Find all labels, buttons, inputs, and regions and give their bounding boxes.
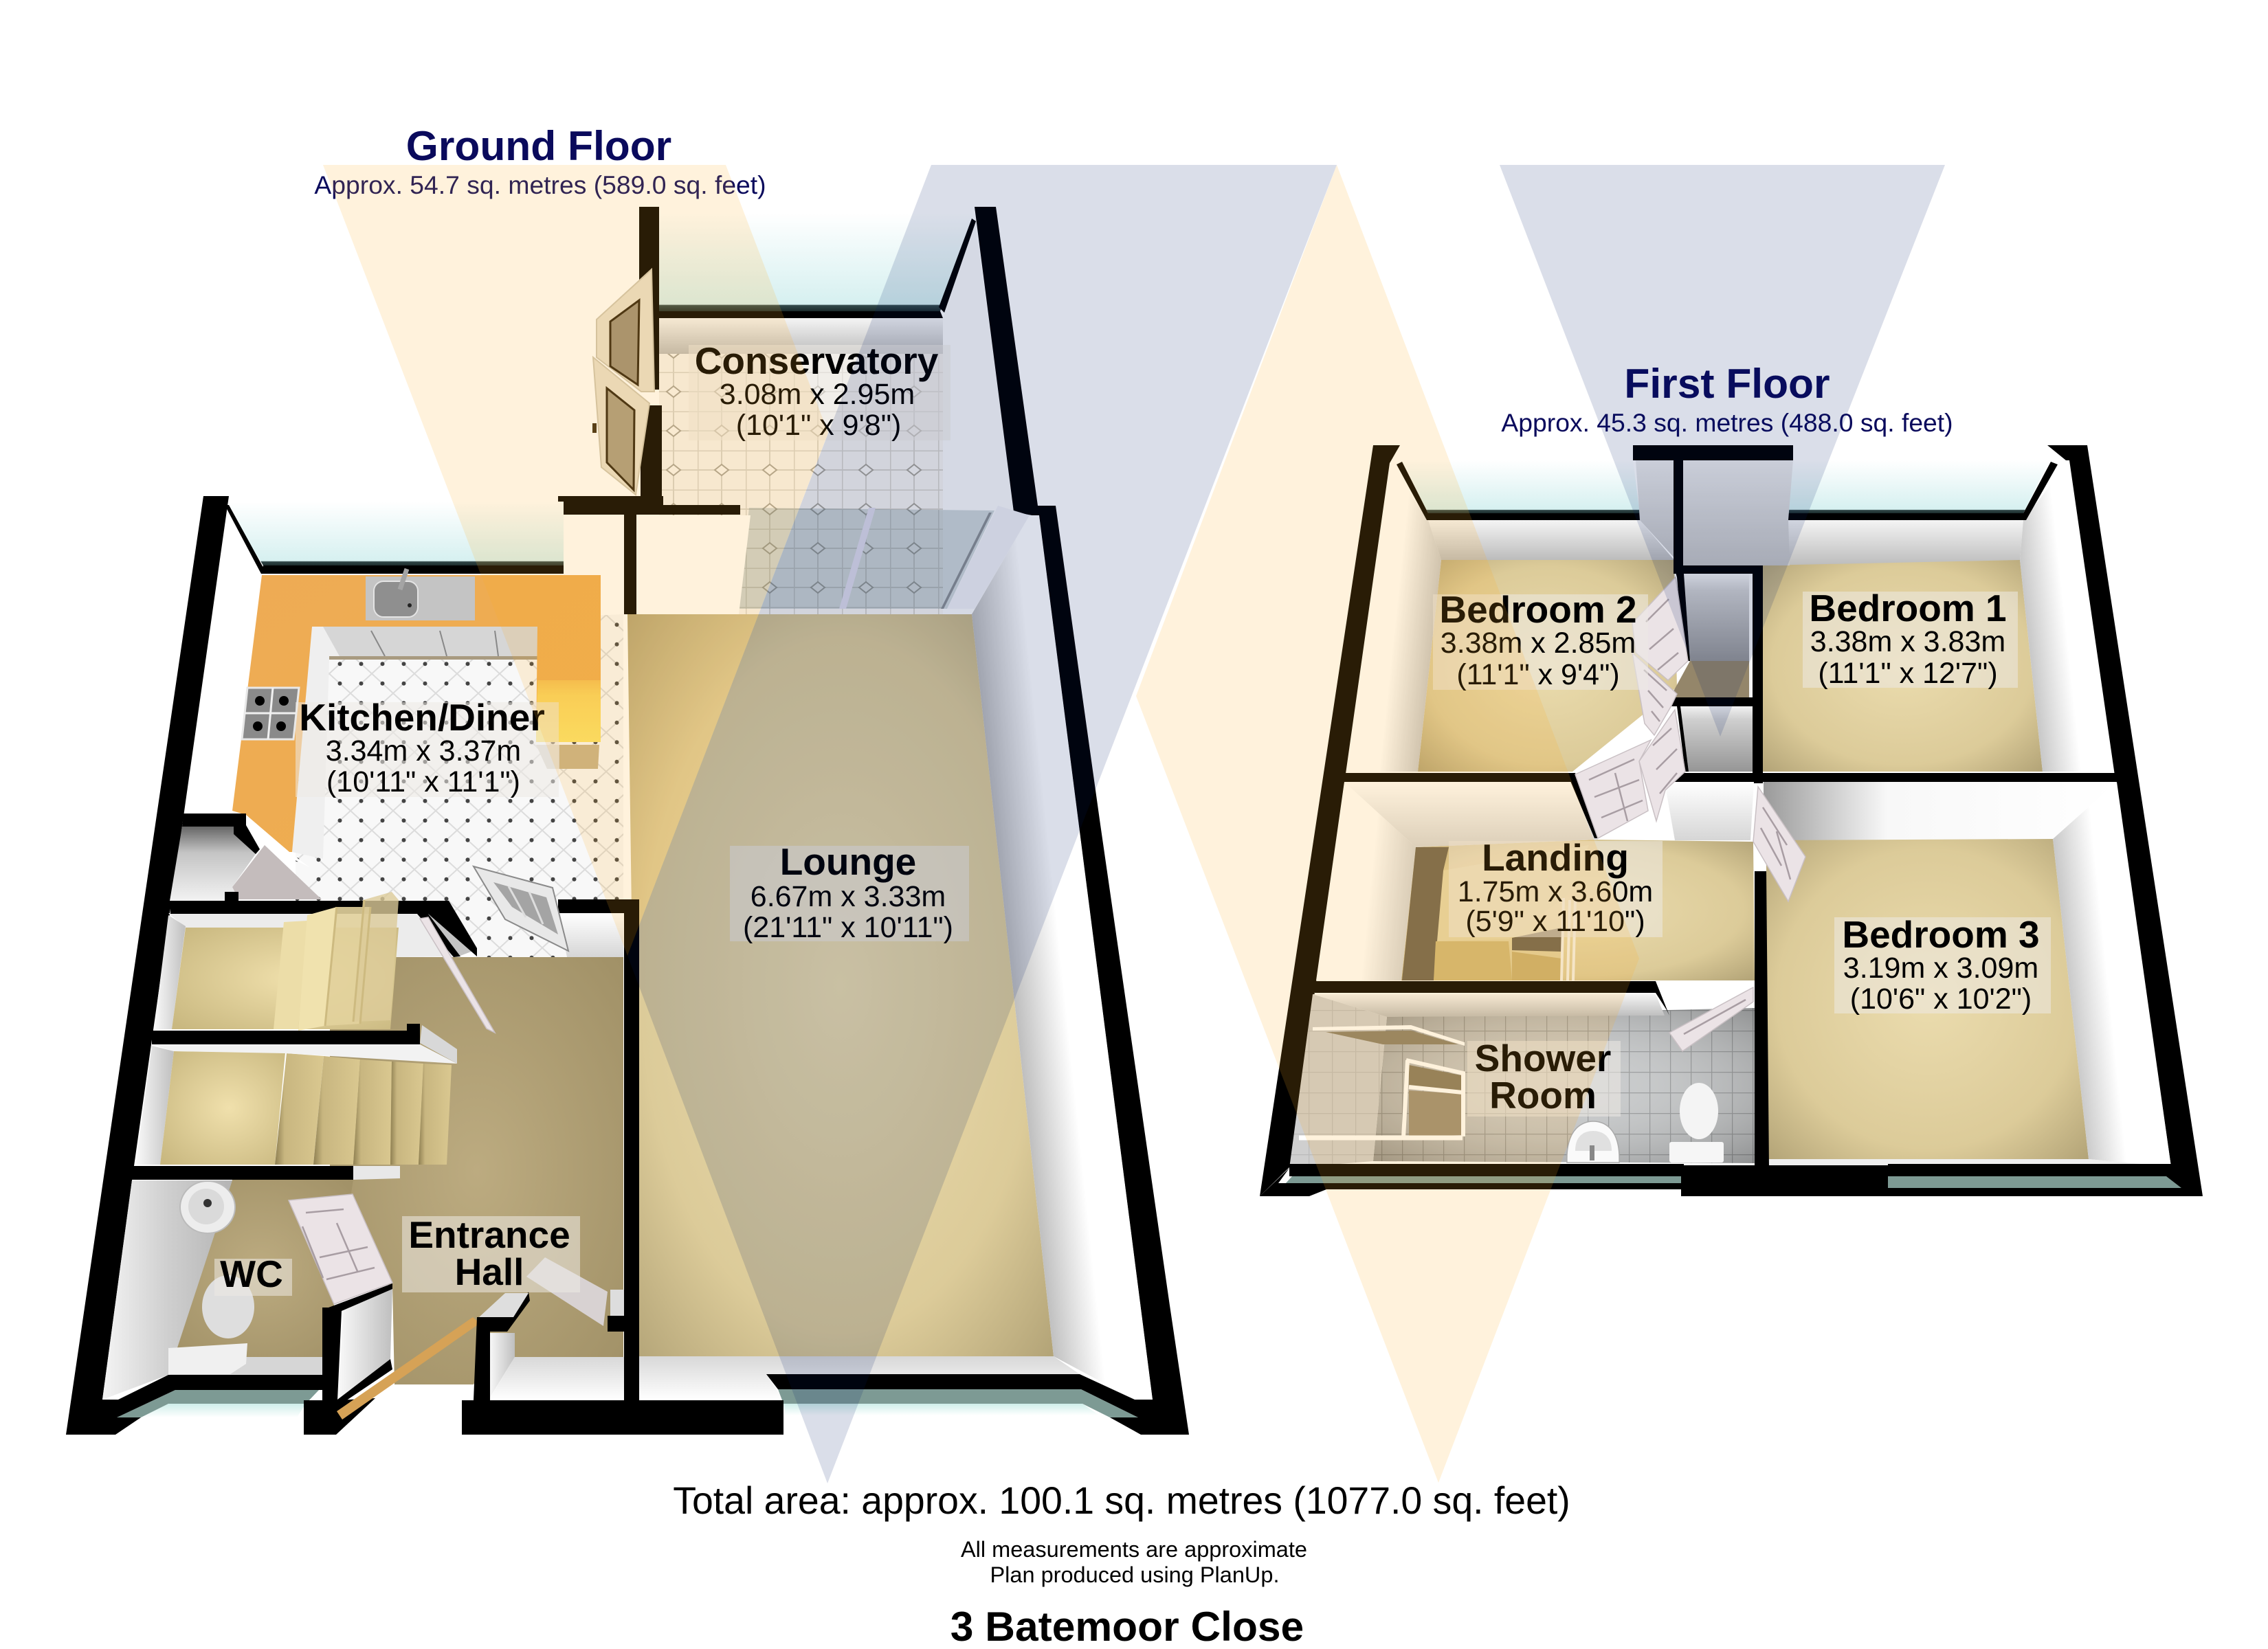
label: Shower Room (1467, 1037, 1621, 1117)
label: First Floor (1501, 360, 1953, 437)
stair lower flight (129, 1024, 457, 1180)
label: Conservatory: Conservatory (695, 339, 939, 382)
conservatory room (639, 207, 1189, 1435)
hall floor (330, 957, 623, 1384)
label: Bedroom 1: 3.38m x 3.83m (1810, 625, 2005, 658)
central wall (624, 899, 639, 1400)
label: Entrance Hall (402, 1213, 580, 1293)
label: Entrance Hall: Entrance (408, 1213, 570, 1256)
label: Ground Floor (314, 122, 766, 199)
label: WC: WC (220, 1253, 283, 1295)
label: Kitchen/Diner: Kitchen/Diner (299, 696, 545, 739)
total area: Total area: approx. 100.1 sq. metres (1077.0 sq. feet) (673, 1479, 1570, 1522)
label: Lounge (730, 840, 969, 944)
WC room (66, 1180, 392, 1435)
label: Bedroom 2: Bedroom 2 (1439, 588, 1637, 631)
lounge walls (462, 515, 1189, 1435)
rear glazing (1402, 460, 2049, 513)
label: Lounge: (21'11" x 10'11") (743, 911, 953, 944)
icon: shower basin (1567, 1121, 1619, 1163)
first floor plan (1260, 445, 2203, 1196)
lounge floor (627, 614, 1054, 1356)
label: Bedroom 3 (1834, 913, 2051, 1016)
label: Bedroom 2: (11'1" x 9'4") (1456, 658, 1620, 691)
label: Entrance Hall: Hall (455, 1250, 524, 1293)
label: Conservatory: 3.08m x 2.95m (720, 378, 915, 411)
bottom window and walls (1260, 871, 2203, 1196)
label: Ground Floor: Approx. 54.7 sq. metres (589.0 sq. feet) (314, 170, 766, 199)
shower enclosure (1299, 1025, 1465, 1138)
shower room (1289, 981, 1755, 1168)
label: Ground Floor: Ground Floor (406, 122, 671, 169)
entrance cupboard (474, 1257, 624, 1400)
disclaimer: Plan produced using PlanUp. (990, 1562, 1279, 1587)
disclaimer (961, 1537, 1307, 1587)
kitchen left wall (66, 496, 262, 1435)
label: Landing: (5'9" x 11'10") (1465, 905, 1645, 938)
label: Bedroom 1 (1803, 587, 2018, 690)
label: Conservatory (689, 339, 950, 442)
conservatory doors (592, 269, 654, 495)
label: Bedroom 3: Bedroom 3 (1842, 913, 2040, 956)
label: Bedroom 3: 3.19m x 3.09m (1843, 952, 2038, 985)
kitchen worktop (232, 575, 601, 859)
bedroom 2 room (1346, 462, 1677, 772)
outer walls (1260, 445, 2203, 1196)
label: Shower Room: Room (1489, 1074, 1597, 1117)
icon: shower toilet (1669, 1083, 1724, 1163)
icon: WC toilet (168, 1275, 254, 1374)
ground floor plan (66, 207, 1189, 1435)
label: First Floor: First Floor (1624, 360, 1830, 407)
label: Kitchen/Diner: (10'11" x 11'1") (326, 765, 520, 798)
bedroom 1 room (1763, 460, 2117, 772)
label: Bedroom 2 (1433, 588, 1648, 691)
icon: WC basin (180, 1181, 235, 1233)
label: First Floor: Approx. 45.3 sq. metres (488.0 sq. feet) (1501, 408, 1953, 437)
label: Bedroom 1: (11'1" x 12'7") (1818, 657, 1998, 690)
icon: sink (366, 569, 475, 620)
label: Bedroom 2: 3.38m x 2.85m (1441, 627, 1636, 660)
disclaimer: All measurements are approximate (961, 1537, 1307, 1562)
watermark shapes (323, 165, 1945, 1483)
label: Bedroom 1: Bedroom 1 (1809, 587, 2007, 629)
kitchen floor (296, 614, 623, 957)
central chimney walls (1633, 445, 1793, 574)
label: Kitchen/Diner: 3.34m x 3.37m (326, 734, 521, 767)
WC door (289, 1194, 392, 1304)
label: Landing (1449, 836, 1663, 938)
landing room (1316, 773, 2117, 980)
pantry (170, 814, 322, 901)
label: Lounge: 6.67m x 3.33m (751, 880, 946, 913)
interior doors (1575, 577, 1805, 1051)
label: Landing: Landing (1482, 836, 1629, 879)
entrance door (337, 1317, 480, 1420)
label: Conservatory: (10'1" x 9'8") (736, 409, 901, 442)
icon: hob (242, 688, 299, 739)
bedroom 3 room (1764, 782, 2171, 1167)
kitchen window (220, 502, 564, 574)
label: Lounge: Lounge (780, 840, 916, 883)
pillar between conservatory and kitchen (558, 496, 751, 614)
label: Kitchen/Diner (296, 696, 559, 798)
label: Landing: 1.75m x 3.60m (1458, 875, 1653, 908)
label: Shower Room: Shower (1475, 1037, 1611, 1079)
closets (1670, 565, 1763, 783)
stair upper flight (154, 892, 636, 1031)
kitchen door (474, 866, 568, 951)
hall door (420, 917, 495, 1033)
label: Bedroom 3: (10'6" x 10'2") (1850, 983, 2032, 1016)
address: 3 Batemoor Close (950, 1603, 1304, 1649)
